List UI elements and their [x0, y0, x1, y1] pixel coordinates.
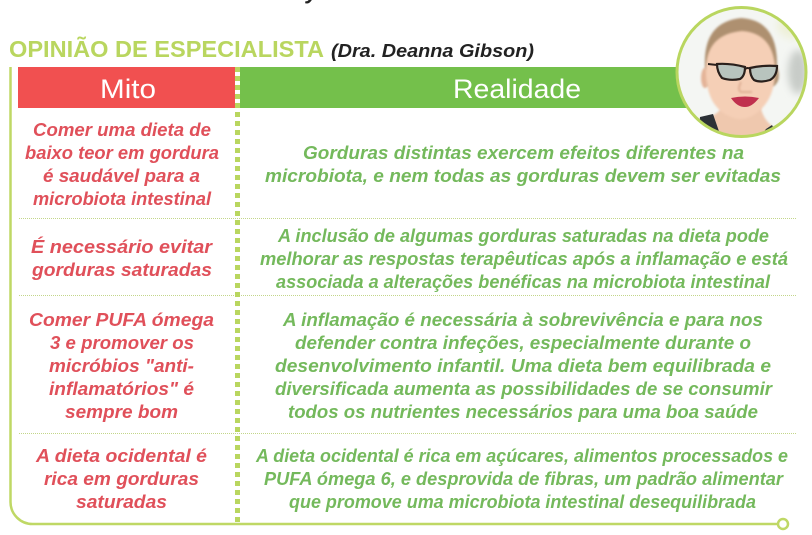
- header: Mito: [18, 67, 235, 108]
- dark top: [700, 114, 719, 131]
- row 3: realidade: desenvolvimento infantil. Uma dieta bem equilibrada e: [275, 355, 771, 376]
- row 3: mito: inflamatórios" é: [49, 378, 194, 399]
- frame end circle: [778, 519, 788, 529]
- row separators: [19, 218, 797, 434]
- row 1: mito: microbiota intestinal: [33, 188, 212, 209]
- row 1: realidade: microbiota, e nem todas as gorduras devem ser evitadas: [265, 165, 781, 186]
- row 1: realidade: [265, 142, 781, 186]
- row 3: mito: [29, 309, 214, 422]
- row 3: realidade: A inflamação é necessária à sobrevivência e para nos: [282, 309, 763, 330]
- row 1: mito: [25, 119, 219, 209]
- row 4: realidade: que promove uma microbiota intestinal desequilibrada: [289, 491, 756, 512]
- glasses: [717, 64, 777, 82]
- header: Mito: Mito: [100, 74, 156, 104]
- row 4: mito: saturadas: [76, 491, 167, 512]
- header: Realidade: [240, 67, 690, 108]
- row 2: realidade: A inclusão de algumas gorduras saturadas na dieta pode: [277, 225, 769, 246]
- row 3: mito: 3 e promover os: [50, 332, 194, 353]
- neck and chest: [713, 108, 773, 135]
- row 1: mito: baixo teor em gordura: [25, 142, 219, 163]
- row 3: mito: Comer PUFA ómega: [29, 309, 214, 330]
- row 2: mito: É necessário evitar: [31, 236, 214, 257]
- row 4: mito: rica em gorduras: [44, 468, 199, 489]
- portrait: Dra. Deanna Gibson: [676, 7, 812, 140]
- header: Realidade: Realidade: [453, 74, 581, 104]
- row 3: realidade: todos os nutrientes necessários para uma boa saúde: [288, 401, 758, 422]
- row 4: mito: A dieta ocidental é: [35, 445, 207, 466]
- row 1: mito: é saudável para a: [43, 165, 200, 186]
- row 4: mito: [35, 445, 207, 512]
- row 3: mito: micróbios "anti-: [49, 355, 194, 376]
- heading: [9, 35, 534, 62]
- row 4: realidade: PUFA ómega 6, e desprovida de fibras, um padrão alimentar: [264, 468, 785, 489]
- row 1: realidade: Gorduras distintas exercem efeitos diferentes na: [303, 142, 744, 163]
- row 3: mito: sempre bom: [65, 401, 178, 422]
- row 2: realidade: melhorar as respostas terapêuticas após a inflamação e está: [260, 248, 788, 269]
- row 3: realidade: defender contra infeções, especialmente durante o: [295, 332, 751, 353]
- heading: (Dra. Deanna Gibson): [331, 41, 534, 61]
- row 2: realidade: associada a alterações benéficas na microbiota intestinal: [276, 271, 771, 292]
- row 2: mito: [31, 236, 214, 280]
- column divider: [235, 67, 240, 524]
- row 4: realidade: A dieta ocidental é rica em açúcares, alimentos processados e: [255, 445, 788, 466]
- face: [706, 31, 775, 119]
- hair: [705, 18, 779, 86]
- row 3: realidade: diversificada aumenta as possibilidades de se consumir: [275, 378, 774, 399]
- ear: [701, 68, 709, 88]
- row 3: realidade: [275, 309, 774, 422]
- row 2: realidade: [260, 225, 788, 292]
- mouth: [731, 96, 759, 107]
- row 2: mito: gorduras saturadas: [31, 259, 212, 280]
- row 4: realidade: [255, 445, 788, 512]
- nose shadow: [739, 82, 752, 92]
- row 1: mito: Comer uma dieta de: [33, 119, 211, 140]
- heading: OPINIÃO DE ESPECIALISTA: [9, 35, 324, 62]
